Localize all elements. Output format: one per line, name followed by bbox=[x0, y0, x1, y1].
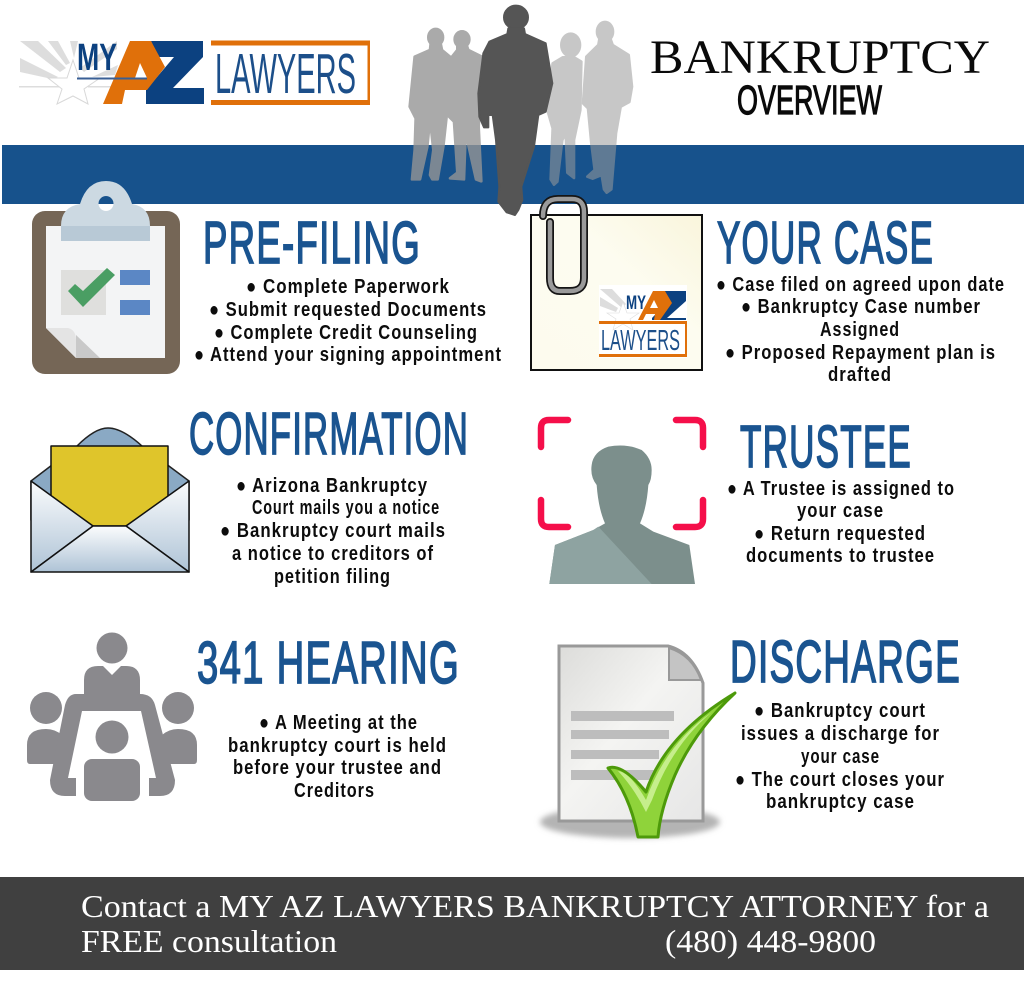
text: Pre-Filing bullets: ● Attend your signing appointment bbox=[194, 344, 502, 366]
text: Your Case bullets bbox=[716, 274, 1005, 386]
text: Trustee bullets: ● A Trustee is assigned to bbox=[727, 478, 955, 500]
text: Discharge bullets: your case bbox=[801, 746, 880, 768]
text: Confirmation bullets: ● Bankruptcy court mails bbox=[220, 520, 446, 542]
title: BANKRUPTCY bbox=[650, 31, 990, 84]
blue banner band bbox=[2, 145, 1024, 204]
text: 341 Hearing bullets: before your trustee and bbox=[233, 757, 442, 779]
text: Your Case bullets: drafted bbox=[828, 364, 892, 386]
footer call to action: (480) 448-9800 bbox=[665, 923, 876, 959]
footer call to action: Contact a MY AZ LAWYERS BANKRUPTCY ATTORNEY for a bbox=[81, 888, 989, 924]
text: Trustee bullets bbox=[727, 478, 955, 567]
icon: clipboard bbox=[32, 181, 180, 374]
footer call to action: FREE consultation bbox=[81, 923, 337, 959]
icon: document with green check bbox=[540, 646, 735, 838]
text: Confirmation bullets: petition filing bbox=[274, 566, 391, 588]
icon: trustee portrait with focus corners bbox=[541, 420, 703, 584]
text: Discharge bullets: ● The court closes your bbox=[735, 769, 945, 791]
text: Discharge bullets: ● Bankruptcy court bbox=[754, 700, 926, 722]
heading: 341 Hearing: 341 HEARING bbox=[197, 630, 460, 696]
text: Trustee bullets: your case bbox=[797, 500, 884, 522]
text: Pre-Filing bullets bbox=[194, 276, 502, 366]
heading: Trustee: TRUSTEE bbox=[740, 414, 912, 480]
heading: Pre-Filing: PRE-FILING bbox=[203, 210, 421, 276]
icon: note with paperclip and logo: MY bbox=[626, 293, 646, 314]
text: Confirmation bullets: Court mails you a notice bbox=[252, 497, 440, 519]
icon: note with paperclip and logo bbox=[531, 199, 702, 370]
text: Your Case bullets: ● Bankruptcy Case number bbox=[741, 296, 981, 318]
text: Confirmation bullets: a notice to creditors of bbox=[232, 543, 434, 565]
icon: note with paperclip and logo: LAWYERS bbox=[601, 325, 680, 357]
text: Discharge bullets bbox=[735, 700, 945, 813]
logo: My AZ Lawyers: MY bbox=[77, 37, 117, 79]
heading: Confirmation: CONFIRMATION bbox=[189, 401, 469, 467]
text: Trustee bullets: documents to trustee bbox=[746, 545, 935, 567]
text: 341 Hearing bullets: ● A Meeting at the bbox=[259, 712, 418, 734]
logo: My AZ Lawyers: LAWYERS bbox=[215, 42, 356, 106]
text: 341 Hearing bullets: Creditors bbox=[294, 780, 375, 802]
text: Discharge bullets: bankruptcy case bbox=[766, 791, 915, 813]
text: Confirmation bullets bbox=[220, 475, 446, 588]
text: Confirmation bullets: ● Arizona Bankruptcy bbox=[236, 475, 428, 497]
text: 341 Hearing bullets bbox=[228, 712, 447, 802]
footer call to action bbox=[0, 877, 1024, 970]
text: Discharge bullets: issues a discharge for bbox=[741, 723, 940, 745]
text: 341 Hearing bullets: bankruptcy court is held bbox=[228, 735, 447, 757]
title bbox=[650, 31, 990, 123]
logo: My AZ Lawyers bbox=[19, 37, 370, 106]
icon: meeting around a table bbox=[27, 632, 197, 801]
text: Your Case bullets: Assigned bbox=[820, 319, 900, 341]
text: Pre-Filing bullets: ● Complete Paperwork bbox=[246, 276, 450, 298]
icon: open envelope bbox=[31, 428, 189, 572]
silhouettes of people bbox=[410, 6, 632, 215]
text: Pre-Filing bullets: ● Submit requested Documents bbox=[209, 299, 487, 321]
text: Trustee bullets: ● Return requested bbox=[754, 523, 926, 545]
text: Pre-Filing bullets: ● Complete Credit Counseling bbox=[214, 322, 478, 344]
title: OVERVIEW bbox=[737, 77, 882, 123]
